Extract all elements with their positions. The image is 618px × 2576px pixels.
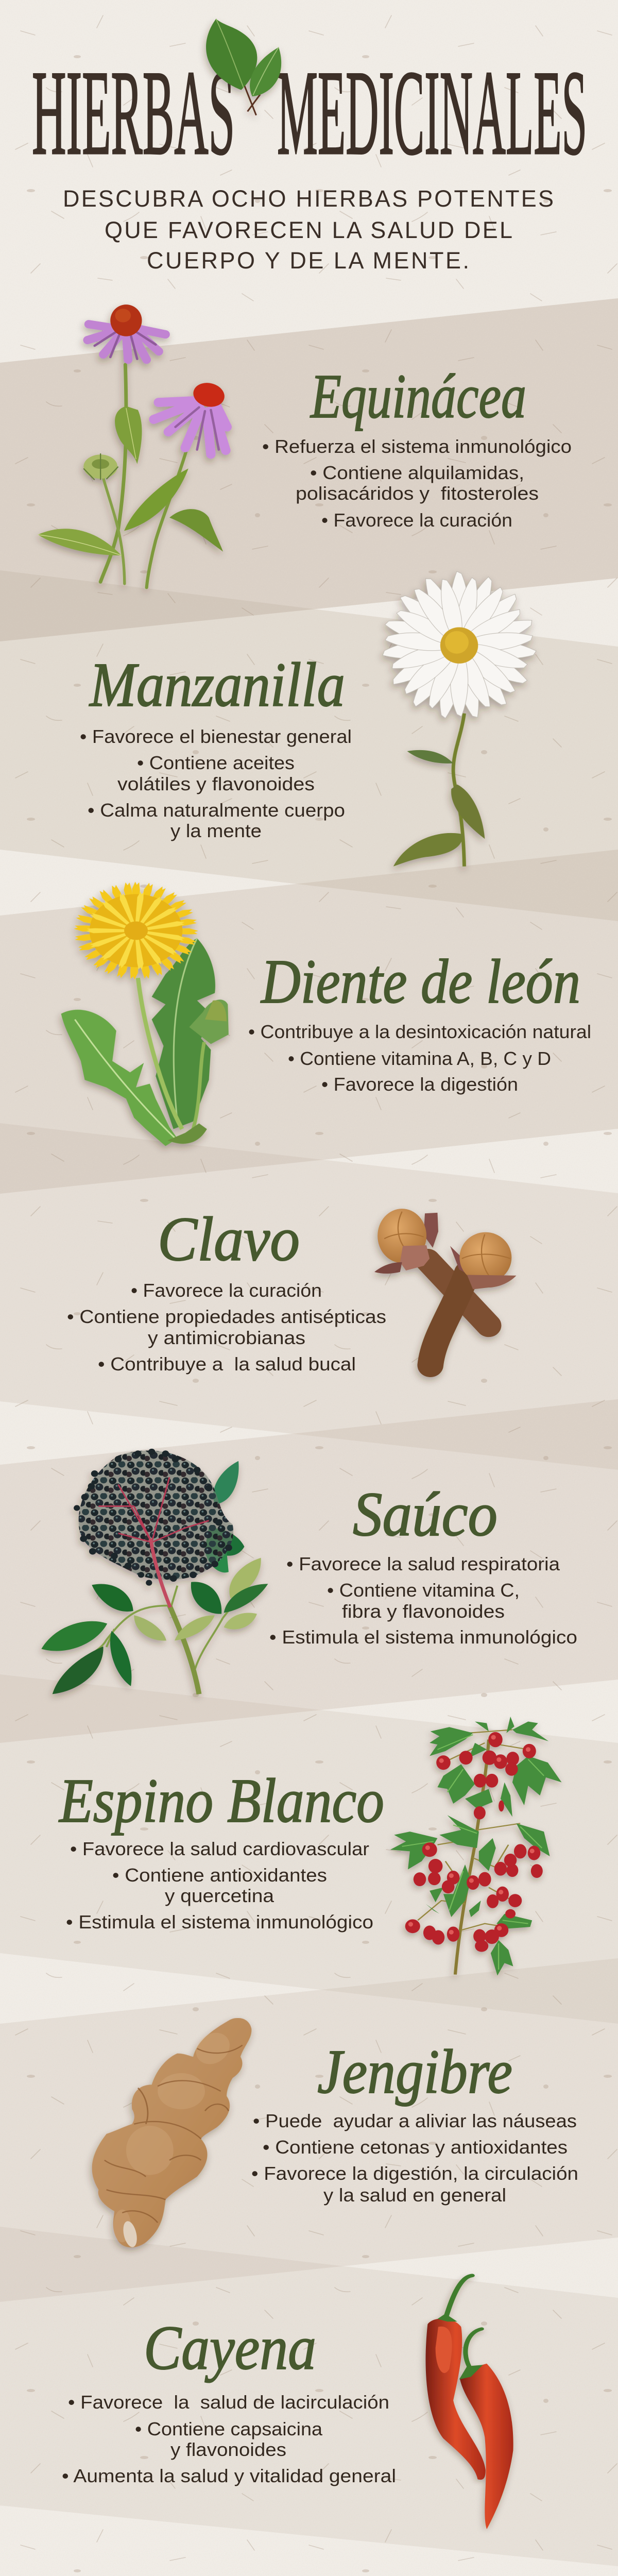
icon: basil leaves	[206, 19, 281, 115]
band 6	[0, 1674, 618, 2024]
panel: Manzanilla	[80, 571, 537, 867]
bullet list: • Favorece la salud de lacirculación	[68, 2392, 389, 2413]
bullet list: • Favorece la salud cardiovascular	[70, 1838, 369, 1859]
illustration: hawthorn branch	[390, 1717, 562, 1975]
heading: Diente de león: Diente de león	[260, 947, 580, 1016]
bullet list: • Contiene alquilamidas,	[310, 462, 524, 483]
band 4	[0, 1123, 618, 1470]
panel: Clavo	[67, 1205, 517, 1375]
illustration: cayenne chilies	[425, 2276, 513, 2529]
heading: Clavo: Clavo	[158, 1205, 300, 1274]
bullet list: • Favorece la curación	[131, 1280, 322, 1301]
bullet list: y la mente	[170, 820, 262, 841]
bullet list: • Favorece la curación	[321, 510, 512, 531]
bullet list: • Contribuye a la desintoxicación natural	[248, 1021, 591, 1042]
band 5	[0, 1399, 618, 1743]
bullet list	[251, 2110, 578, 2206]
bullet list: • Calma naturalmente cuerpo	[88, 800, 345, 821]
subtitle	[63, 185, 554, 274]
bullet list: • Favorece la digestión	[321, 1074, 518, 1095]
bullet list	[67, 1280, 386, 1375]
bullet list: • Contiene propiedades antisépticas	[67, 1306, 386, 1327]
panel: Espino Blanco	[58, 1717, 562, 1975]
heading: Equinácea: Equinácea	[310, 362, 526, 431]
bullet list: y la salud en general	[323, 2184, 506, 2206]
illustration: elderberry	[41, 1449, 268, 1694]
illustration: echinacea	[38, 304, 227, 587]
bullet list: • Contiene aceites	[137, 752, 295, 773]
illustration: dandelion	[61, 882, 229, 1146]
bullet list	[269, 1553, 577, 1648]
header	[32, 19, 587, 274]
bullet list: • Puede ayudar a aliviar las náuseas	[253, 2110, 577, 2131]
bullet list	[80, 726, 352, 841]
bullet list: fibra y flavonoides	[342, 1601, 505, 1622]
bullet list	[262, 436, 572, 531]
band 8	[0, 2227, 618, 2566]
illustration: cloves	[374, 1209, 517, 1365]
heading: Manzanilla: Manzanilla	[89, 650, 345, 720]
illustration: ginger root	[92, 2018, 251, 2248]
bullet list: • Favorece el bienestar general	[80, 726, 352, 747]
bullet list: y flavonoides	[170, 2439, 286, 2460]
panel: Equinácea	[38, 304, 572, 587]
bullet list: • Favorece la digestión, la circulación	[251, 2163, 578, 2184]
heading: Jengibre: Jengibre	[317, 2037, 512, 2107]
panel: Diente de león	[61, 882, 591, 1146]
bullet list	[248, 1021, 591, 1095]
bullet list: y antimicrobianas	[148, 1327, 305, 1348]
bullet list: • Favorece la salud respiratoria	[286, 1553, 560, 1574]
bullet list: • Contiene vitamina C,	[327, 1580, 520, 1601]
band 2	[0, 570, 618, 921]
subtitle: DESCUBRA OCHO HIERBAS POTENTES	[63, 185, 554, 212]
panel: Cayena	[62, 2276, 513, 2529]
heading: Saúco: Saúco	[353, 1480, 497, 1549]
bullet list: • Contribuye a la salud bucal	[98, 1353, 356, 1375]
bullet list: • Contiene cetonas y antioxidantes	[263, 2137, 568, 2158]
band 1	[0, 298, 618, 641]
bullet list	[62, 2392, 396, 2486]
bullet list: volátiles y flavonoides	[117, 773, 315, 794]
bullet list: • Contiene vitamina A, B, C y D	[288, 1048, 551, 1069]
bullet list: • Estimula el sistema inmunológico	[66, 1911, 373, 1933]
illustration: chamomile flower	[382, 571, 537, 867]
subtitle: QUE FAVORECEN LA SALUD DEL	[105, 217, 512, 243]
bullet list: • Refuerza el sistema inmunológico	[262, 436, 572, 457]
subtitle: CUERPO Y DE LA MENTE.	[147, 247, 469, 274]
band 3	[0, 850, 618, 1194]
panel: Jengibre	[92, 2018, 578, 2248]
bullet list: polisacáridos y fitosteroles	[296, 483, 539, 504]
bullet list: y quercetina	[165, 1885, 274, 1906]
bullet list: • Aumenta la salud y vitalidad general	[62, 2465, 396, 2486]
band 7	[0, 1958, 618, 2302]
heading: Espino Blanco: Espino Blanco	[58, 1766, 384, 1836]
bullet list	[66, 1838, 373, 1933]
bullet list: • Contiene antioxidantes	[112, 1865, 327, 1886]
heading: Cayena: Cayena	[144, 2313, 316, 2383]
panel: Saúco	[41, 1449, 577, 1694]
bullet list: • Estimula el sistema inmunológico	[269, 1626, 577, 1648]
title: HIERBAS	[32, 46, 235, 180]
bullet list: • Contiene capsaicina	[135, 2418, 323, 2439]
